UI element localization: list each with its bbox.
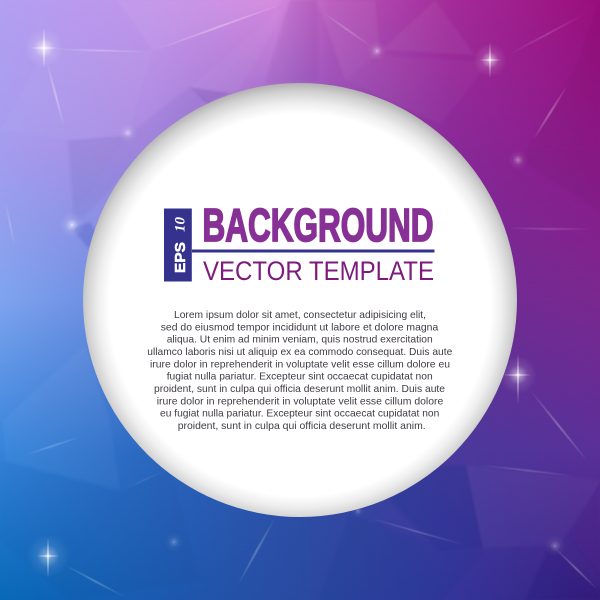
sparkle: top left [24, 28, 64, 68]
EPS 10 badge [164, 208, 192, 282]
sparkle: bottom dim [164, 532, 184, 552]
body paragraph [147, 309, 452, 432]
sparkle: left [59, 212, 85, 238]
body paragraph: proident, sunt in culpa qui officia deserunt mollit anim. [178, 420, 426, 432]
body paragraph: Lorem ipsum dolor sit amet, consectetur adipisicing elit, [174, 309, 426, 321]
sparkle: top right [473, 42, 507, 78]
body paragraph: ullamco laboris nisi ut aliquip ex ea commodo consequat. Duis aute [147, 346, 452, 358]
sparkle: top centre [367, 41, 387, 61]
body paragraph: sed do eiusmod tempor incididunt ut labore et dolore magna [161, 321, 438, 333]
sparkle: upper left dim [118, 123, 138, 143]
body paragraph: aliqua. Ut enim ad minim veniam, quis nostrud exercitation [167, 334, 433, 346]
sparkle: right [499, 354, 537, 404]
body paragraph: irure dolor in reprehenderit in voluptate velit esse cillum dolore eu [150, 358, 450, 370]
EPS 10 badge: EPS [172, 242, 189, 273]
body paragraph: fugiat nulla pariatur. Excepteur sint occaecat cupidatat non [167, 371, 433, 383]
subtitle: VECTOR TEMPLATE [203, 256, 434, 286]
sparkle: bottom right [544, 535, 566, 557]
title: BACKGROUND [202, 199, 434, 251]
title rule [192, 250, 434, 252]
sparkle: bottom centre [351, 504, 365, 518]
EPS 10 badge: 10 [172, 216, 188, 232]
sparkle: right dim [508, 150, 528, 170]
body paragraph: eu fugiat nulla pariatur. Excepteur sint occaecat cupidatat non [160, 408, 439, 420]
body paragraph: proident, sunt in culpa qui officia deserunt mollit anim. Duis aute [154, 383, 445, 395]
white circle panel [83, 83, 517, 517]
sparkle: bottom left [26, 534, 70, 578]
body paragraph: irure dolor in reprehenderit in voluptate velit esse cillum dolore [157, 395, 443, 407]
